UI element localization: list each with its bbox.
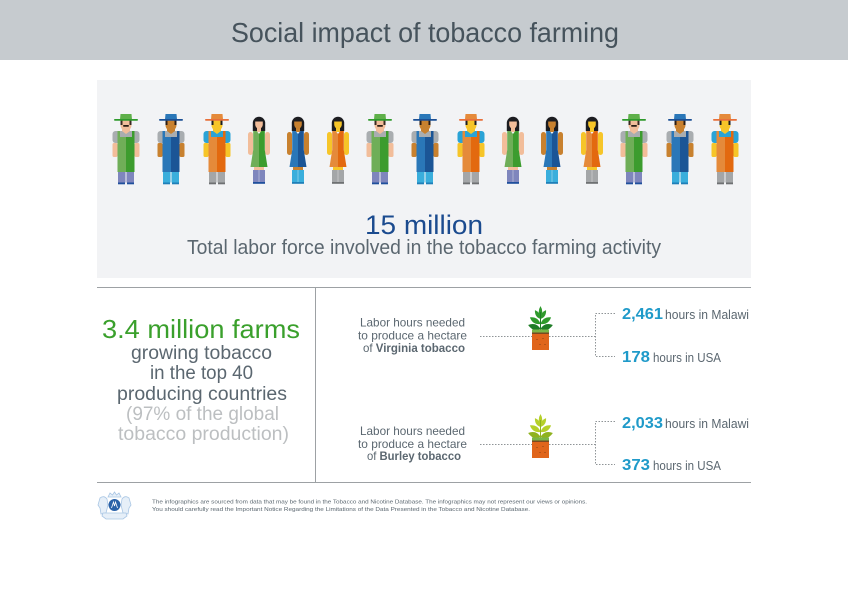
icon: crest logo — [97, 492, 132, 520]
icon: Burley tobacco plant — [527, 414, 554, 458]
global share note: (97% of the global — [126, 404, 279, 425]
Virginia label: Labor hours needed — [360, 316, 465, 330]
panel: Burley tobacco labor hours: hours in Malawi — [665, 417, 749, 431]
farms description: producing countries — [117, 384, 287, 405]
Virginia label: to produce a hectare — [358, 328, 467, 342]
footer disclaimer — [152, 500, 587, 513]
Virginia label — [358, 316, 467, 355]
panel: Burley tobacco labor hours — [358, 414, 749, 474]
global share note: tobacco production) — [118, 424, 289, 445]
Burley Malawi value: 2,033 — [622, 415, 663, 432]
Virginia USA value: 178 — [622, 349, 650, 366]
farms description: in the top 40 — [150, 363, 253, 384]
panel: Virginia tobacco labor hours — [358, 306, 749, 366]
footer disclaimer: The infographics are sourced from data that may be found in the Tobacco and Nicotine Database. The infographics may not represent our views or opinions. — [152, 500, 587, 506]
Burley connector — [480, 422, 615, 464]
icon: Virginia tobacco plant — [527, 306, 554, 350]
footer disclaimer: You should carefully read the Important Notice Regarding the Limitations of the Data Presented in the Tobacco and Nicotine Database. — [152, 507, 530, 513]
panel: labor force — [97, 80, 751, 278]
Burley USA value: 373 — [622, 457, 650, 474]
Virginia label: of Virginia tobacco — [363, 341, 465, 355]
panel: farms statistic — [102, 314, 300, 445]
Virginia Malawi value: 2,461 — [622, 306, 663, 323]
panel: Virginia tobacco labor hours: hours in USA — [653, 351, 722, 365]
Burley label: to produce a hectare — [358, 437, 467, 451]
Burley label — [358, 424, 467, 463]
Virginia connector — [480, 314, 615, 356]
header band — [0, 0, 848, 60]
labor force caption: Total labor force involved in the tobacco farming activity — [187, 237, 661, 259]
labor force number: 15 million — [365, 210, 483, 240]
farms description — [117, 343, 287, 405]
row of farm workers — [112, 114, 738, 184]
panel: Virginia tobacco labor hours: hours in Malawi — [665, 308, 749, 322]
farms number: 3.4 million farms — [102, 314, 300, 344]
title: Social impact of tobacco farming — [231, 17, 619, 48]
global share note — [118, 404, 289, 445]
Burley label: of Burley tobacco — [367, 449, 461, 463]
farms description: growing tobacco — [131, 343, 272, 364]
Burley label: Labor hours needed — [360, 424, 465, 438]
panel: Burley tobacco labor hours: hours in USA — [653, 459, 722, 473]
